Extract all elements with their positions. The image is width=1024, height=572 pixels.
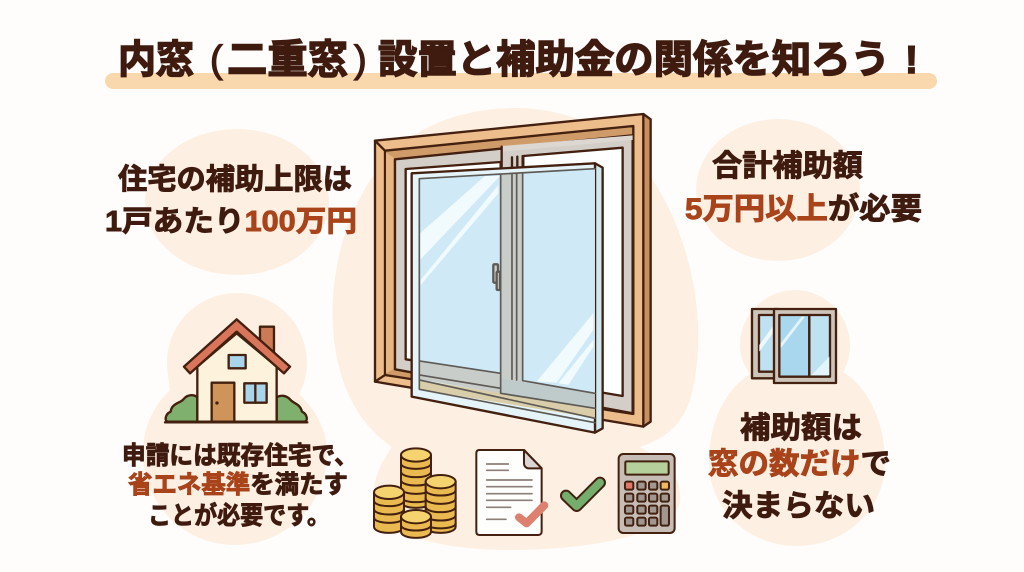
text: not only window count: 窓の数だけで (708, 448, 891, 481)
title: 内窓 (118, 39, 194, 82)
glass highlights (420, 176, 500, 260)
back coin stack (401, 455, 431, 508)
text: 50,000 yen or more required: 5万円以上が必要 (685, 192, 922, 226)
title: ) (354, 39, 367, 81)
text: application line 2: 省エネ基準を満たす (128, 471, 348, 499)
icon row (374, 448, 675, 538)
sash seen through glass (501, 174, 523, 393)
left coin stack (374, 492, 404, 533)
glass blue area left (419, 174, 501, 373)
icon: small double window (752, 309, 836, 383)
panel: total subsidy minimum (685, 119, 922, 261)
icon: coin stacks (374, 448, 456, 538)
front sash (774, 309, 836, 383)
icon: document (476, 450, 544, 535)
red check mark (519, 505, 544, 523)
title: ( (210, 39, 223, 81)
icon: house (165, 319, 307, 422)
title highlight bar (105, 73, 937, 89)
circle backgrounds (709, 290, 885, 546)
grey sash frame (395, 135, 633, 413)
title: 二重窓 (227, 38, 348, 82)
main window illustration (375, 114, 651, 433)
text: subsidy cap per home: 住宅の補助上限は (118, 163, 352, 196)
title: 設置と補助金の関係を知ろう (378, 39, 890, 82)
panel: housing subsidy cap (105, 129, 357, 275)
icon: bushes (166, 395, 307, 422)
open panes behind glass (406, 147, 623, 396)
text: is not determined: 決まらない (722, 490, 875, 523)
circle backgrounds (143, 293, 327, 545)
text: 1 unit 1 million yen: 1戸あたり 100万円 (105, 206, 357, 238)
inner glass pane (412, 163, 603, 433)
central peach blob (332, 108, 698, 550)
glass blue area right (523, 169, 595, 393)
icon: right window (244, 383, 267, 403)
icon: chimney (260, 327, 274, 357)
outer wooden frame (375, 114, 651, 427)
right coin stack (426, 482, 456, 533)
panel: application requirement (122, 293, 358, 545)
panel: subsidy not only window count (708, 290, 891, 546)
icon: calculator (619, 454, 675, 533)
back sash (752, 309, 779, 378)
title (118, 38, 918, 82)
text: application line 3: ことが必要です。 (148, 501, 330, 530)
front coin stack (401, 517, 431, 538)
title: ! (905, 39, 918, 82)
icon: door (212, 383, 234, 422)
icon: top window (229, 355, 246, 368)
circle background (696, 119, 860, 261)
circle background (145, 129, 329, 275)
text: application line 1: 申請には既存住宅で、 (122, 442, 358, 470)
window handle (493, 264, 500, 290)
icon: roof (184, 319, 290, 373)
icon: green check mark (566, 483, 600, 506)
text: subsidy amount: 補助額は (740, 412, 862, 445)
icon: house body (197, 333, 277, 422)
text: total subsidy: 合計補助額 (712, 150, 863, 183)
